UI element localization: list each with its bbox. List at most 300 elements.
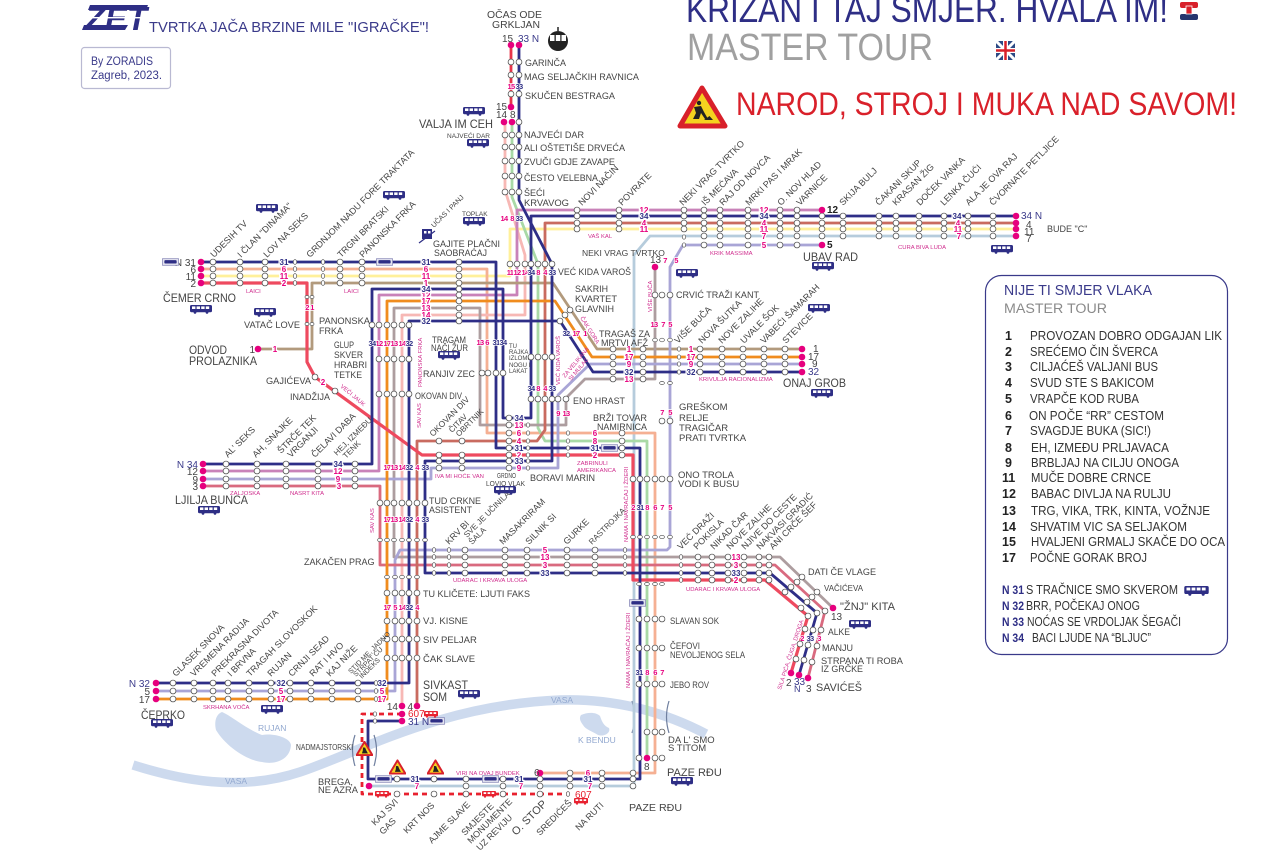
station names: west: ČEPRKO bbox=[141, 707, 185, 722]
route 14 bbox=[402, 122, 525, 706]
route 17 bbox=[156, 301, 802, 699]
rotated station names: Čeprko branch: KAJ NIŽE bbox=[324, 643, 359, 678]
legend route names: MUČE DOBRE CRNCE bbox=[1031, 470, 1151, 485]
route numbers in navy on vertical columns: 31 bbox=[493, 338, 500, 347]
station names: east: TRAGIČAR bbox=[679, 423, 728, 434]
route numbers in pink on rows: 1 bbox=[689, 345, 694, 354]
station names: north branch: TOPLAK bbox=[462, 211, 488, 218]
route 11 bbox=[201, 229, 1016, 276]
route numbers in pink on vertical columns: 1 bbox=[310, 303, 314, 312]
water labels: K BENDU bbox=[578, 735, 616, 745]
route numbers in pink on vertical columns: 6 bbox=[653, 668, 657, 677]
legend route numbers: 11 bbox=[1002, 471, 1015, 485]
station names: east: ALKE bbox=[828, 627, 850, 638]
route numbers in pink on vertical columns: 13 bbox=[391, 339, 398, 348]
route numbers in pink on rows: 17 bbox=[277, 695, 286, 704]
route numbers in pink on vertical columns: 2 bbox=[631, 503, 635, 512]
station names: west: PROLAZNIKA bbox=[189, 356, 257, 368]
rotated station names: Čeprko branch: STRPAT ĆU bbox=[351, 645, 385, 678]
route numbers in pink on rows: 8 bbox=[593, 437, 598, 446]
route numbers in pink on vertical columns: 4 bbox=[415, 463, 420, 472]
station names: centre: TU bbox=[509, 344, 517, 350]
rotated station names: south: O. STOP bbox=[510, 798, 550, 838]
line name captions in magenta: AMERIKANCA bbox=[577, 468, 616, 474]
route numbers in pink on vertical columns: 17 bbox=[384, 339, 391, 348]
route numbers in navy on rows: 32 bbox=[687, 368, 696, 377]
station names: east: DATI ČE VLAGE bbox=[808, 567, 876, 578]
route numbers in pink on rows: 3 bbox=[337, 482, 342, 491]
terminus route numbers: N bbox=[794, 684, 800, 694]
rotated station names: central east rows: OKOVAN DIV bbox=[427, 394, 472, 438]
rotated station names: Ljilja Bunca branch: HEJ, IZMEĐU bbox=[332, 415, 374, 457]
water labels: VASA bbox=[225, 776, 247, 786]
station names: north branch: ZVUČI GDJE ZAVAPE bbox=[524, 157, 615, 168]
station names: south: SLAVAN SOK bbox=[670, 616, 720, 627]
rotated station names: Onaj Grob branch: VABEĆI ŠAMARAH bbox=[758, 282, 822, 345]
station names: south: ČEFOVI bbox=[670, 641, 700, 652]
legend route names: BRBLJAJ NA CILJU ONOGA bbox=[1031, 456, 1180, 470]
rotated station names: Žnj Kita branch: NAKVASI GRADIĆ bbox=[754, 490, 815, 551]
stations: north branch and centre bbox=[479, 59, 573, 402]
rotated station names: Žnj Kita branch: POKISLA bbox=[691, 517, 726, 551]
stations: rows 5 13 3 33 bbox=[432, 547, 828, 665]
route 9 bbox=[203, 364, 802, 479]
route numbers in pink on vertical columns: 12 bbox=[376, 339, 383, 348]
stations: east middle rows bbox=[610, 292, 788, 424]
legend route numbers: 5 bbox=[1005, 392, 1012, 406]
terminus route numbers: 8 bbox=[644, 762, 650, 773]
route numbers in pink on vertical columns: 13 bbox=[391, 515, 398, 524]
route 12 bbox=[203, 210, 822, 471]
route numbers in pink on rows: 6 bbox=[593, 429, 598, 438]
route numbers in pink on rows: 5 bbox=[279, 687, 284, 696]
legend route numbers: 6 bbox=[1005, 409, 1012, 423]
rotated station names: Žnj Kita branch: VEĆ DRAŽI bbox=[675, 510, 716, 551]
route numbers in navy on rows: 31 bbox=[515, 444, 524, 453]
station names: centre: BORAVI MARIN bbox=[530, 473, 595, 484]
rotated station names: Čeprko branch: RAT I HVO bbox=[307, 640, 346, 678]
terminus route numbers: 1 bbox=[813, 344, 819, 355]
line name captions in magenta: VIRI NA OVAJ BUNDEK bbox=[456, 771, 520, 777]
route numbers in pink on vertical columns: 8 bbox=[536, 268, 540, 277]
route 32 bbox=[156, 321, 802, 683]
route numbers in pink on vertical columns: 13 bbox=[563, 409, 570, 418]
route numbers in navy on vertical columns: 33 bbox=[516, 82, 523, 91]
route 1 bbox=[258, 283, 802, 349]
terminus route numbers: 6 bbox=[534, 768, 540, 779]
rotated station names: north-west: I ČLAN "DINAMA" bbox=[235, 201, 294, 259]
station names: south: DA L' SMO bbox=[668, 735, 715, 746]
terminus route numbers: 17 bbox=[808, 352, 820, 363]
station names: centre: SOM bbox=[423, 690, 447, 704]
legend panel bbox=[986, 276, 1228, 654]
route numbers in pink on rows: 11 bbox=[954, 225, 963, 234]
line name captions in magenta: SI MULAC bbox=[568, 357, 591, 382]
credit box bbox=[82, 48, 170, 88]
route numbers in navy on rows: 33 bbox=[515, 457, 524, 466]
legend route numbers: 14 bbox=[1002, 520, 1016, 534]
line name captions in magenta: SAV KAS bbox=[417, 403, 423, 428]
rotated station names: north-east: NEKI VRAG TVRTKO bbox=[677, 138, 746, 207]
station names: west: GAJIĆEVA bbox=[266, 376, 312, 387]
route numbers in pink on rows: 2 bbox=[734, 576, 739, 585]
legend route numbers: 12 bbox=[1002, 487, 1016, 501]
rotated station names: Onaj Grob branch: STEVICE bbox=[780, 311, 815, 345]
legend subheading: MASTER TOUR bbox=[1004, 301, 1107, 316]
route 2 bbox=[201, 283, 808, 673]
legend night routes bbox=[1002, 583, 1024, 645]
icon: legend bus bbox=[1184, 586, 1209, 596]
route numbers in pink on vertical columns bbox=[305, 82, 821, 677]
station names: north branch: ŠEĆI bbox=[524, 188, 545, 199]
terminus route numbers: 7 bbox=[1026, 234, 1032, 245]
line name captions in magenta: VAŠ KAL bbox=[588, 233, 613, 240]
route numbers in pink on rows: 13 bbox=[515, 421, 524, 430]
icon: funicular bbox=[419, 229, 435, 243]
station names: north branch: GARINČA bbox=[525, 58, 567, 69]
station names: centre: SAOBRAĆAJ bbox=[434, 248, 487, 259]
station names: north branch: ČESTO VELEBNA bbox=[524, 173, 599, 184]
rotated station names: Žnj Kita branch bbox=[675, 490, 819, 551]
route numbers in pink on vertical columns: 2 bbox=[305, 303, 309, 312]
route numbers in navy on vertical columns: 32 bbox=[406, 339, 413, 348]
station names: east: IZ GRČKE bbox=[821, 664, 863, 675]
icon: cable car bbox=[548, 27, 568, 51]
bus icons on lines bbox=[162, 259, 646, 782]
route numbers in pink on rows: 12 bbox=[640, 206, 649, 215]
line name captions in magenta: NAMA I NAVRAĆAJ I ŽDERI bbox=[624, 612, 632, 688]
station names: north branch: MAG SELJAČKIH RAVNICA bbox=[524, 72, 640, 83]
station names: east: BUDE "C" bbox=[1047, 224, 1087, 234]
terminus markers bbox=[153, 42, 1019, 789]
route numbers in navy on vertical columns: 32 bbox=[406, 515, 413, 524]
route numbers in pink on vertical columns: 17 bbox=[384, 603, 391, 612]
terminus route numbers: 11 bbox=[1024, 227, 1035, 238]
legend route names: NOĆAS SE VRDOLJAK ŠEGAČI bbox=[1027, 614, 1181, 629]
route numbers in pink on rows: 17 bbox=[625, 353, 634, 362]
line name captions in magenta: ZALJOSKA bbox=[230, 491, 260, 497]
station names: west bbox=[141, 290, 375, 722]
route numbers in pink on rows: 2 bbox=[282, 279, 287, 288]
terminus route numbers: 1 bbox=[249, 345, 255, 356]
rotated station names: Ljilja Bunca branch: AL' SEKS bbox=[222, 425, 257, 459]
legend route numbers: 2 bbox=[1005, 345, 1012, 359]
station names: centre: OKOVAN DIV bbox=[415, 391, 463, 402]
legend route names: CILJAĆEŠ VALJANI BUS bbox=[1030, 359, 1158, 374]
route numbers in pink on vertical columns: 14 bbox=[399, 339, 407, 348]
legend route numbers bbox=[1002, 329, 1016, 565]
station names: east: VODI K BUSU bbox=[678, 479, 739, 490]
line name captions in magenta: IVA MI HOĆE VAN bbox=[435, 473, 484, 480]
station names: east: ONAJ GROB bbox=[783, 376, 846, 390]
terminus route numbers: 34 N bbox=[1021, 211, 1042, 222]
water labels: RUJAN bbox=[258, 723, 286, 733]
route numbers in navy on vertical columns: 33 bbox=[549, 384, 556, 393]
station names: east: PRATI TVRTKA bbox=[679, 433, 747, 444]
route numbers in pink on vertical columns: 4 bbox=[543, 268, 548, 277]
station names: centre: NOGU I bbox=[509, 363, 531, 369]
route numbers in navy on rows bbox=[277, 212, 962, 784]
lake: K Bendu bbox=[580, 713, 609, 736]
route numbers in pink on rows: 13 bbox=[541, 553, 550, 562]
rotated station names: north-east: VARNICE bbox=[794, 173, 829, 207]
route numbers in pink on rows: 13 bbox=[625, 375, 634, 384]
station names: east: "ŽNJ" KITA bbox=[840, 600, 896, 613]
route numbers in pink on rows: 11 bbox=[640, 225, 649, 234]
route numbers in pink on vertical columns: 6 bbox=[653, 503, 657, 512]
rotated station names: central east rows: MASAKRIRAM bbox=[497, 497, 547, 546]
legend route names: BACI LJUDE NA “BLJUC” bbox=[1032, 631, 1151, 645]
route numbers in navy on rows: 34 bbox=[640, 212, 649, 221]
terminus route numbers: 12 bbox=[827, 205, 839, 216]
route numbers in navy on rows: 34 bbox=[953, 212, 962, 221]
legend night routes: N 34 bbox=[1002, 631, 1024, 645]
route numbers in pink on rows: 5 bbox=[543, 546, 548, 555]
legend route numbers: 13 bbox=[1002, 504, 1016, 518]
route numbers in pink on vertical columns: 8 bbox=[510, 214, 514, 223]
station names: centre bbox=[415, 239, 651, 704]
station names: north branch: SKUČEN BESTRAGA bbox=[525, 91, 616, 102]
route 5 bbox=[156, 245, 822, 691]
rotated station names: central east rows: GURKE bbox=[561, 517, 591, 546]
route numbers in pink on vertical columns: 14 bbox=[399, 603, 407, 612]
route numbers in navy on vertical columns: 31 bbox=[637, 503, 644, 512]
terminus route numbers: 5 bbox=[827, 240, 833, 251]
route numbers in pink on rows: 12 bbox=[760, 206, 769, 215]
station names: centre: GAJITE PLAČNI bbox=[433, 239, 500, 250]
terminus route numbers: 607 bbox=[575, 790, 592, 801]
route numbers in navy on vertical columns: 33 bbox=[807, 634, 814, 643]
station names: centre: KVARTET bbox=[575, 294, 617, 305]
line name captions in magenta: ZABRINULI bbox=[577, 461, 608, 467]
route numbers in pink on rows: 1 bbox=[627, 345, 632, 354]
station names: east: CRVIĆ TRAŽI KANT bbox=[676, 290, 759, 301]
legend route names: SHVATIM VIC SA SELJAKOM bbox=[1030, 520, 1187, 534]
route 15 bbox=[510, 45, 512, 107]
rotated station names: south bbox=[369, 797, 606, 852]
route numbers in navy on rows: 34 bbox=[334, 460, 343, 469]
route numbers in pink on vertical columns: 17 bbox=[573, 329, 580, 338]
terminus route numbers: 33 bbox=[794, 677, 806, 688]
rotated station names: Žnj Kita branch: ANI CRČE ŠEF bbox=[767, 499, 819, 551]
rotated station names: Čeprko branch: RUJAN bbox=[265, 650, 294, 678]
line name captions in magenta: ZA VELIKANA bbox=[562, 347, 591, 379]
route numbers in pink on vertical columns: 13 bbox=[477, 338, 484, 347]
route numbers in pink on rows: 9 bbox=[336, 475, 341, 484]
station names: centre: RAJKA bbox=[509, 350, 528, 356]
route 8 bbox=[512, 122, 647, 758]
legend route names: S TRAČNICE SMO SKVEROM bbox=[1026, 582, 1178, 597]
route numbers in pink on rows: 7 bbox=[957, 232, 962, 241]
route numbers in pink on rows: 13 bbox=[732, 553, 741, 562]
rotated station names: central east rows: SILNIK SI bbox=[523, 511, 558, 546]
icon: UK flag bbox=[996, 41, 1015, 60]
route numbers in pink on rows: 7 bbox=[588, 782, 593, 791]
legend route names: SVAGDJE BUKA (SIC!) bbox=[1030, 424, 1151, 438]
stations: south section bbox=[373, 582, 665, 797]
route numbers in navy on vertical columns bbox=[369, 82, 814, 677]
route 607 dashed bbox=[362, 714, 568, 794]
icon: large roadworks sign bbox=[680, 88, 725, 126]
logo: ZET: ZET bbox=[84, 0, 150, 37]
terminus route numbers: 13 bbox=[831, 612, 843, 623]
rotated station names: north-east: ČAKANI SKUP bbox=[873, 158, 923, 207]
terminus route numbers: 31 N bbox=[408, 717, 429, 728]
terminus route numbers: 607 bbox=[408, 709, 425, 720]
route 33 bbox=[425, 45, 817, 675]
route numbers in navy on rows: 32 bbox=[378, 679, 387, 688]
icon: Croatian flag bbox=[1180, 2, 1198, 20]
line name captions in magenta: SKRHANA VOČA bbox=[203, 704, 250, 711]
route numbers in pink on rows: 6 bbox=[517, 429, 522, 438]
route 34 bbox=[203, 216, 1016, 464]
route numbers in pink on rows: 2 bbox=[321, 378, 326, 387]
station names: north branch: KRVAVOG bbox=[524, 198, 569, 209]
route numbers in navy on rows: 34 bbox=[515, 414, 524, 423]
station names: centre: SAKRIH bbox=[575, 284, 608, 295]
station names: west: ZAKAČEN PRAG bbox=[304, 557, 375, 567]
rotated station names: north-east bbox=[576, 134, 1061, 207]
route numbers in pink on rows bbox=[273, 206, 963, 791]
rotated station names: Ljilja Bunca branch: TENK bbox=[341, 438, 363, 460]
station names: centre: LAKAT bbox=[509, 369, 528, 375]
station names: east: NEKI VRAG TVRTKO bbox=[582, 248, 665, 258]
bus icons bbox=[151, 107, 1013, 786]
rotated station names: north-east: SKIJA BULJ bbox=[837, 166, 879, 207]
station names: centre: ENO HRAST bbox=[573, 396, 625, 407]
line name captions in magenta: KRIK MASSIMA bbox=[710, 251, 753, 257]
rotated station names: Onaj Grob branch: VIŠE BUČA bbox=[672, 304, 713, 345]
station names: centre: GRDNO bbox=[497, 471, 516, 480]
station names: north branch: VALJA IM CEH bbox=[419, 117, 493, 131]
icon: roadworks sign south B bbox=[428, 760, 443, 774]
rotated station names: Onaj Grob branch bbox=[672, 282, 822, 345]
water labels bbox=[225, 695, 616, 786]
route numbers in pink on vertical columns: 13 bbox=[651, 320, 658, 329]
station names: east: VAČIĆEVA bbox=[824, 583, 863, 593]
rotated station names: south: KAJ SVI bbox=[369, 797, 400, 827]
line name captions in magenta: SAV KAS bbox=[370, 508, 376, 533]
route numbers in navy on rows: 33 bbox=[541, 569, 550, 578]
terminus route numbers: 5 bbox=[144, 687, 150, 698]
station names: south: NEVOLJENOG SELA bbox=[670, 650, 746, 661]
legend route names: EH, IZMEĐU PRLJAVACA bbox=[1031, 441, 1170, 455]
rotated station names: south: SREDIĆEŠ bbox=[534, 798, 574, 837]
line name captions in magenta: NASRT KITA bbox=[290, 491, 324, 497]
route numbers in pink on vertical columns: 8 bbox=[645, 503, 649, 512]
route numbers in navy on rows: 31 bbox=[591, 444, 600, 453]
legend route names: POČNE GORAK BROJ bbox=[1030, 550, 1147, 565]
terminus route numbers: N 31 bbox=[175, 258, 196, 269]
rotated station names: south: UZ REVIJU bbox=[474, 812, 514, 852]
terminus route numbers: 3 bbox=[806, 684, 812, 695]
route 4 bbox=[417, 223, 1016, 706]
station names: centre: NAMIRNICA bbox=[597, 422, 648, 433]
rotated station names: north-east: O. NOV HLAD bbox=[775, 159, 824, 207]
station names: south: NADMAJSTORSKI bbox=[296, 743, 353, 752]
legend heading: NIJE TI SMJER VLAKA bbox=[1004, 283, 1152, 299]
rotated station names: north-east: IŠ MEĆAVA bbox=[699, 167, 740, 207]
rotated station names: Ljilja Bunca branch bbox=[222, 411, 374, 460]
legend route names: PROVOZAN DOBRO ODGAJAN LIK bbox=[1030, 329, 1223, 343]
line name captions in magenta: ČAK GORA bbox=[578, 315, 601, 345]
route numbers in navy on vertical columns: 32 bbox=[563, 329, 570, 338]
route numbers in pink on rows: 3 bbox=[543, 561, 548, 570]
route numbers in navy on rows: 32 bbox=[625, 368, 634, 377]
terminus route numbers: 14 bbox=[496, 110, 508, 121]
station names: centre: RANJIV ZEC bbox=[423, 369, 475, 380]
line name captions in magenta: VIŠE BUČA bbox=[647, 281, 654, 312]
station names: centre: ASISTENT bbox=[429, 505, 472, 516]
night train icons bbox=[375, 711, 588, 805]
rotated station names: Ljilja Bunca branch: VRGANJI bbox=[285, 425, 320, 459]
line name captions in magenta: PANONSKA FRKA bbox=[418, 338, 424, 387]
legend night routes: N 31 bbox=[1002, 583, 1024, 597]
rotated station names: central east rows bbox=[427, 394, 628, 546]
station names: west: PANONSKA bbox=[319, 316, 371, 327]
route numbers in navy on rows: 34 bbox=[760, 212, 769, 221]
stations: left vertical lines bbox=[369, 322, 428, 661]
line name captions in magenta: SILA PIĆA, ČUGA, DROGA bbox=[776, 619, 805, 691]
route numbers in navy on rows: 31 bbox=[280, 258, 289, 267]
route numbers in pink on vertical columns: 7 bbox=[660, 668, 664, 677]
rotated station names: south: SMJESTE bbox=[459, 801, 496, 837]
terminus route numbers: 3 bbox=[192, 482, 198, 493]
route numbers in pink on vertical columns: 4 bbox=[415, 603, 420, 612]
line name captions in magenta: VEĆI JAUK bbox=[339, 383, 367, 408]
station names: east bbox=[582, 224, 1087, 694]
station names: centre: TUD CRKNE bbox=[429, 496, 481, 507]
rotated station names: Ljilja Bunca branch: AH, SNAJKE bbox=[250, 415, 295, 459]
route numbers in pink on rows: 4 bbox=[956, 219, 961, 228]
station names: centre: TRAGAŠ ZA bbox=[599, 329, 651, 340]
route numbers in pink on rows: 4 bbox=[642, 219, 647, 228]
station names: south: BREGA, bbox=[318, 777, 353, 788]
rotated station names: Čeprko branch: INDEKS bbox=[358, 657, 382, 680]
station names: south: S TITOM bbox=[668, 743, 706, 754]
route numbers in pink on vertical columns: 8 bbox=[536, 384, 540, 393]
route numbers in navy on rows: 31 bbox=[584, 775, 593, 784]
station names: east: MANJU bbox=[822, 643, 853, 654]
rotated station names: Ljilja Bunca branch: ČELAVI DABA bbox=[309, 411, 358, 459]
station names: centre: SIVKAST bbox=[423, 678, 469, 692]
legend night routes: N 32 bbox=[1002, 599, 1024, 613]
station names: centre: TRAGAM bbox=[432, 335, 466, 345]
station names: centre: MRTVI AFŽ bbox=[601, 338, 648, 349]
route numbers in pink on rows: 11 bbox=[422, 272, 431, 281]
line name captions in magenta: UDARAC I KRVAVA ULOGA bbox=[686, 587, 760, 593]
rotated station names: Žnj Kita branch: NJIVE DO CESTE bbox=[739, 492, 799, 551]
terminus route numbers: 2 bbox=[786, 678, 792, 689]
route numbers in navy on vertical columns: 34 bbox=[528, 268, 536, 277]
stations: top-left rows bbox=[210, 259, 462, 394]
route numbers in pink on vertical columns: 7 bbox=[661, 320, 665, 329]
route numbers in navy on rows: 31 bbox=[422, 258, 431, 267]
rotated station names: Čeprko branch: VREMENA RADIJA bbox=[188, 616, 251, 678]
line name captions in magenta: NAMA I NAVRAĆAJ I ŽDERI bbox=[622, 466, 630, 542]
terminus route numbers: 9 bbox=[192, 475, 198, 486]
rotated station names: north-east: ČVORNATE PETLJICE bbox=[987, 134, 1061, 207]
rotated station names: north-east: POVRATE bbox=[616, 170, 653, 207]
legend route numbers: 15 bbox=[1002, 535, 1016, 549]
line name captions in magenta: CURA BIVA LUDA bbox=[898, 245, 946, 251]
route numbers in pink on rows: 11 bbox=[760, 225, 769, 234]
route numbers in pink on rows: 7 bbox=[519, 782, 524, 791]
station names: south: PAZE RĐU bbox=[667, 767, 722, 779]
terminus route numbers: 4 bbox=[1026, 220, 1032, 231]
route numbers in pink on vertical columns: 7 bbox=[660, 408, 664, 417]
station names: west: LJILJA BUNCA bbox=[175, 493, 248, 507]
